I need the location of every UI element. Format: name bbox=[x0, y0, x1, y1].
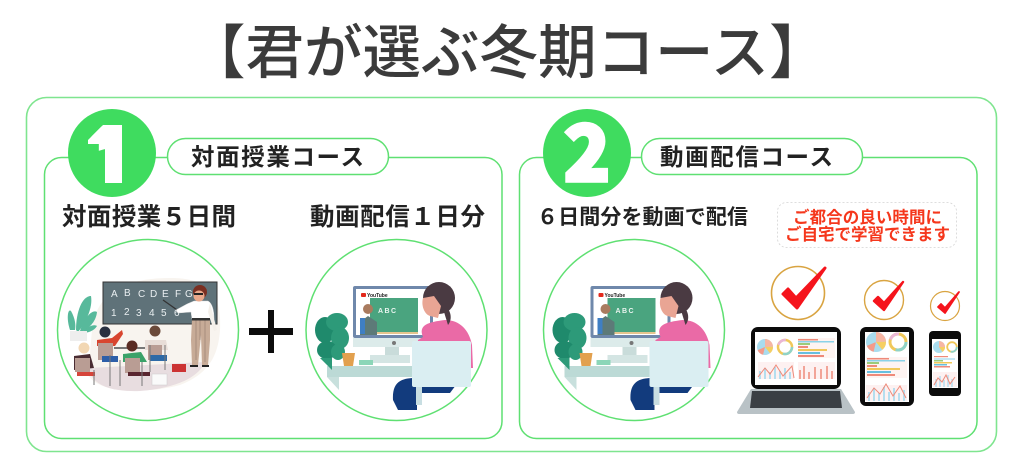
video learner illustration: ABC bbox=[378, 308, 396, 315]
callout: study at home: ご自宅で学習できます bbox=[785, 224, 950, 244]
classroom illustration: 1 bbox=[111, 308, 117, 319]
classroom illustration: D bbox=[150, 289, 157, 300]
badge: number 2: 2 bbox=[564, 93, 610, 203]
video learner illustration bbox=[306, 240, 487, 420]
badge: number 1 bbox=[68, 109, 156, 197]
outer frame bbox=[26, 98, 996, 452]
panel: course 2 bbox=[520, 93, 977, 438]
video learner illustration: ABC bbox=[616, 308, 634, 315]
panel 2 border bbox=[520, 158, 977, 438]
course 1 label pill bbox=[168, 138, 388, 174]
classroom illustration: 3 bbox=[136, 308, 142, 319]
icon: tablet check mark bbox=[864, 280, 904, 320]
heading: 6 days by video: ６日間分を動画で配信 bbox=[537, 206, 748, 229]
classroom illustration: A bbox=[111, 289, 118, 300]
callout: study at home bbox=[778, 202, 956, 248]
icon: smartphone with dashboard bbox=[929, 331, 961, 396]
classroom illustration: E bbox=[162, 289, 169, 300]
plus sign bbox=[249, 310, 293, 353]
icon: laptop check mark bbox=[772, 266, 825, 320]
title: 【君が選ぶ冬期コース】 bbox=[187, 21, 828, 86]
classroom illustration: 2 bbox=[124, 307, 130, 318]
icon: tablet with dashboard bbox=[860, 327, 914, 406]
classroom illustration: 6 bbox=[174, 308, 180, 319]
callout: study at home: ご都合の良い時間に bbox=[793, 207, 942, 227]
classroom illustration bbox=[58, 240, 238, 420]
classroom illustration: 4 bbox=[149, 308, 155, 319]
course 1 label pill: 対面授業コース bbox=[191, 144, 364, 170]
classroom illustration: 5 bbox=[161, 308, 167, 319]
heading: video 1 day: 動画配信１日分 bbox=[310, 203, 486, 231]
icon: laptop with dashboard bbox=[737, 327, 855, 414]
course 2 label pill: 動画配信コース bbox=[660, 144, 833, 170]
badge: number 1: 1 bbox=[83, 86, 137, 216]
icon: phone check mark bbox=[930, 292, 960, 320]
panel: course 1 bbox=[44, 86, 502, 438]
video learner illustration: YouTube bbox=[367, 293, 388, 299]
video learner illustration bbox=[544, 240, 724, 420]
badge: number 2 bbox=[543, 93, 631, 203]
heading: in-person 5 days: 対面授業５日間 bbox=[62, 203, 236, 231]
panel 1 border bbox=[44, 158, 502, 438]
course 2 label pill bbox=[642, 138, 862, 174]
classroom illustration: C bbox=[138, 289, 145, 300]
classroom illustration: B bbox=[124, 288, 131, 299]
classroom illustration: G bbox=[185, 289, 193, 300]
video learner illustration: YouTube bbox=[604, 293, 625, 299]
classroom illustration: F bbox=[175, 289, 181, 300]
